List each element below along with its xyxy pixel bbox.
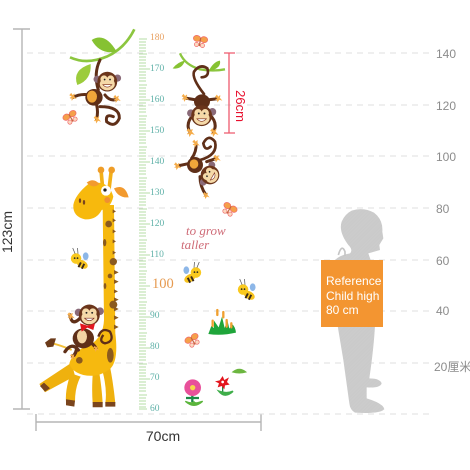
grow taller script: to grow [186,223,226,238]
monkey on right vine [173,53,225,136]
ruler numbers: 100 [152,276,174,292]
width dimension bar [36,414,261,444]
ruler numbers: 170 [150,64,164,74]
grow taller script [181,223,226,252]
ruler numbers [150,33,174,414]
scale labels: 60 [436,254,450,268]
butterflies [62,35,238,349]
child silhouette [322,209,384,413]
ruler numbers: 150 [150,126,164,136]
green ruler [139,39,150,409]
orange reference box [321,260,383,327]
width label: 70cm [146,428,180,444]
ruler numbers: 80 [150,342,160,352]
bees [71,248,256,302]
scale labels: 40 [436,304,450,318]
ruler numbers: 90 [150,311,160,321]
ruler numbers: 60 [150,404,160,414]
monkey on left vine [70,29,134,124]
scale labels: 100 [436,150,456,164]
26cm label: 26cm [233,90,248,122]
ruler numbers: 120 [150,219,164,229]
orange reference box: Child high [326,289,379,303]
scale labels: 80 [436,202,450,216]
height dimension bar [0,29,30,409]
scale labels: 120 [436,99,456,113]
red 26cm marker [224,53,248,133]
orange reference box: 80 cm [326,303,359,317]
ruler numbers: 140 [150,157,164,167]
monkey hanging below [175,138,225,198]
scale labels [434,47,470,374]
reeds plant [208,310,236,335]
scale labels: 140 [436,47,456,61]
giraffe with monkey [39,167,129,407]
ruler numbers: 180 [150,33,164,43]
ruler numbers: 160 [150,95,164,105]
sitting monkey [65,305,112,359]
ruler numbers: 130 [150,188,164,198]
grow taller script: taller [181,237,210,252]
flowers [184,369,246,405]
orange reference box: Reference [326,274,382,288]
ruler numbers: 110 [150,250,164,260]
ruler numbers: 70 [150,373,160,383]
